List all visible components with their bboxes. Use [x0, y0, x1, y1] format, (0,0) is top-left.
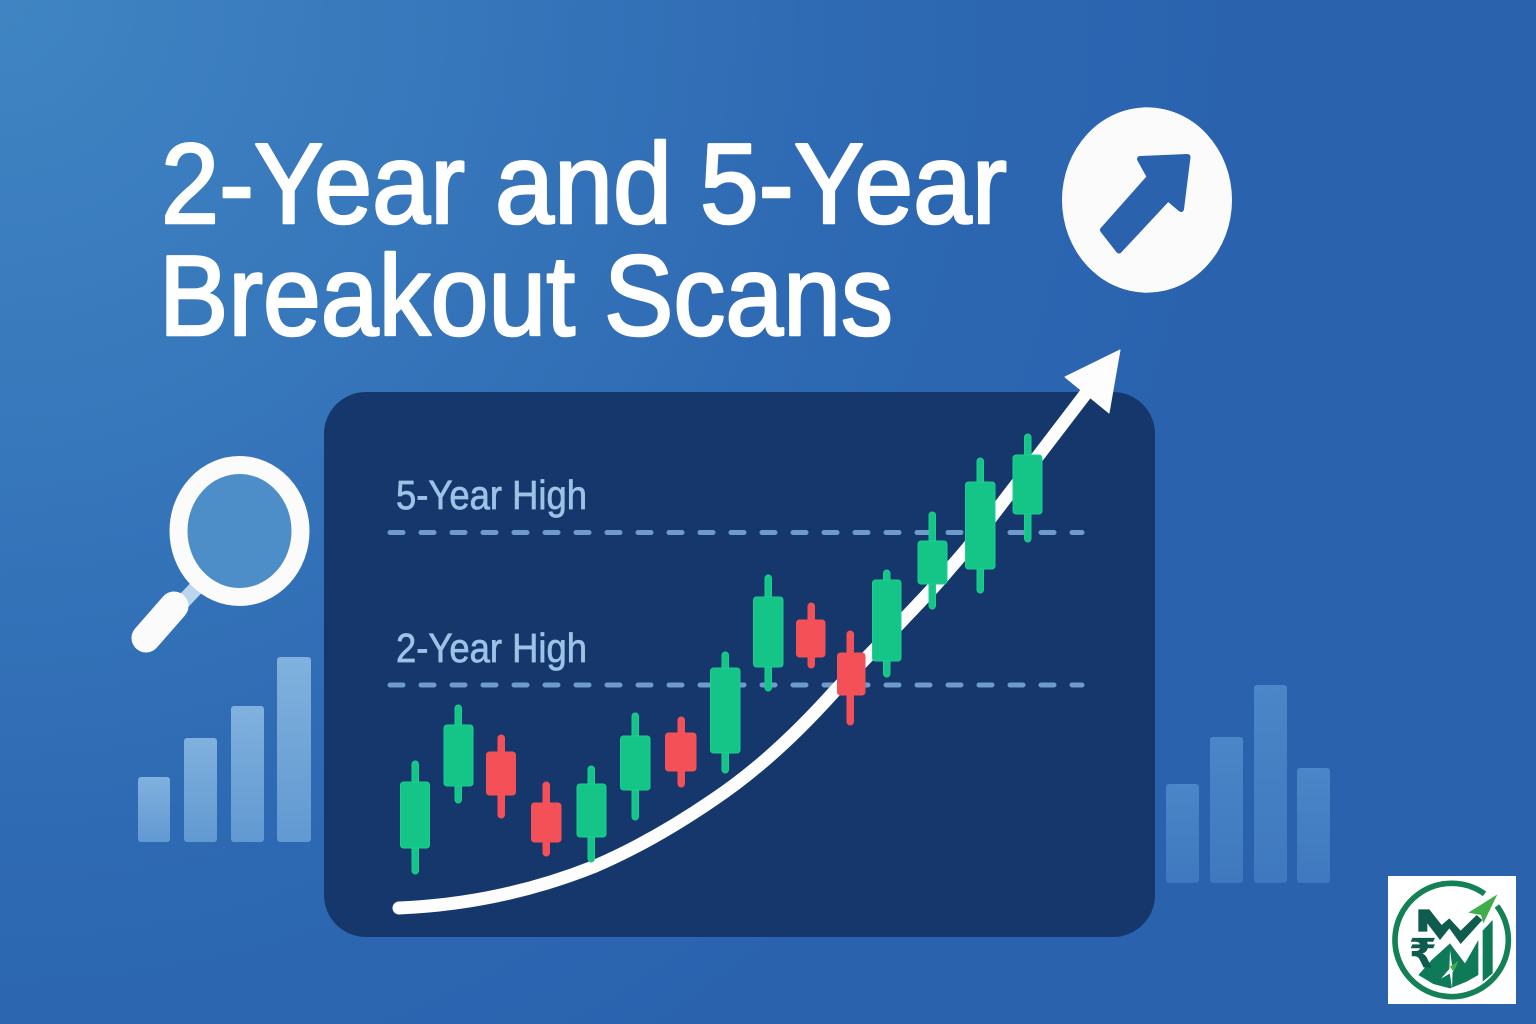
label: 5-Year High: 5-Year High	[396, 472, 587, 518]
5-year high dashed line	[390, 530, 1082, 535]
logo: ₹	[1409, 929, 1437, 977]
right bar chart	[1166, 685, 1330, 883]
rising trend arrow	[399, 350, 1120, 908]
logo	[1372, 861, 1531, 1019]
icon: circle with up-right arrow	[1062, 107, 1232, 293]
title: 2-Year	[161, 121, 465, 248]
candlestick chart	[400, 434, 1042, 874]
title	[159, 121, 1007, 360]
title: Breakout Scans	[159, 233, 893, 360]
icon: magnifying glass	[146, 465, 300, 638]
left bar chart	[138, 657, 311, 842]
panel: chart background	[324, 392, 1155, 937]
2-year high dashed line	[390, 682, 1082, 688]
label: 2-Year High: 2-Year High	[396, 625, 587, 671]
red candles	[486, 603, 865, 856]
title: 5-Year	[700, 121, 1007, 248]
title: and	[495, 121, 672, 248]
green candles	[400, 434, 1042, 874]
